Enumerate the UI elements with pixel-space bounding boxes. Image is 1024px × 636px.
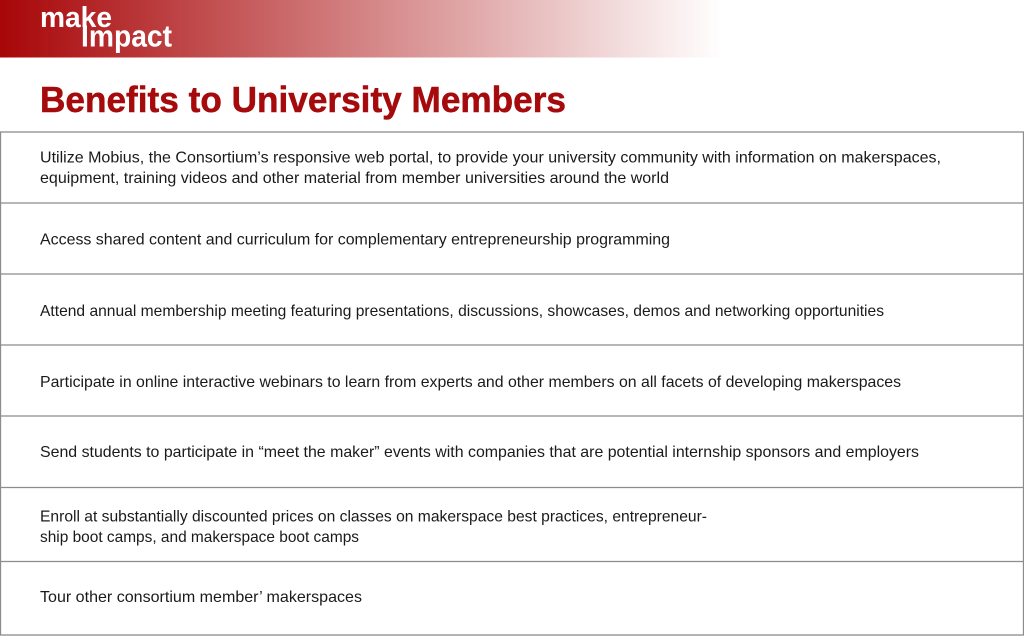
row 3: annual meeting: Attend annual membership meeting featuring presentations, discussions, showcases, demos and networking opportunities <box>40 303 884 320</box>
row 6: discounted classes: Enroll at substantially discounted prices on classes on makerspace best practices, entrepreneur- <box>40 508 707 526</box>
logo: make impact: make <box>40 2 112 34</box>
table frame and row dividers <box>0 132 1024 635</box>
row 1: Mobius portal: Utilize Mobius, the Consortium’s responsive web portal, to provide your university community with information on makerspaces, <box>40 150 941 166</box>
row 7: tours: Tour other consortium member’ makerspaces <box>40 589 362 606</box>
row 6: discounted classes: ship boot camps, and makerspace boot camps <box>40 529 359 546</box>
benefits table <box>0 132 1024 635</box>
row 2: shared content: Access shared content and curriculum for complementary entrepreneurship programming <box>40 232 670 248</box>
row 1: Mobius portal: equipment, training videos and other material from member universities around the world <box>40 170 669 187</box>
row 4: webinars: Participate in online interactive webinars to learn from experts and other members on all facets of developing makerspaces <box>40 374 901 391</box>
row 1: Mobius portal <box>40 150 941 187</box>
header gradient banner <box>0 0 722 58</box>
row 6: discounted classes <box>40 508 707 546</box>
title: Benefits to University Members <box>40 79 566 120</box>
row 5: meet the maker: Send students to participate in “meet the maker” events with companies that are potential internship sponsors and employers <box>40 444 919 461</box>
logo: make impact <box>40 2 172 54</box>
logo: make impact: Impact <box>81 18 172 54</box>
